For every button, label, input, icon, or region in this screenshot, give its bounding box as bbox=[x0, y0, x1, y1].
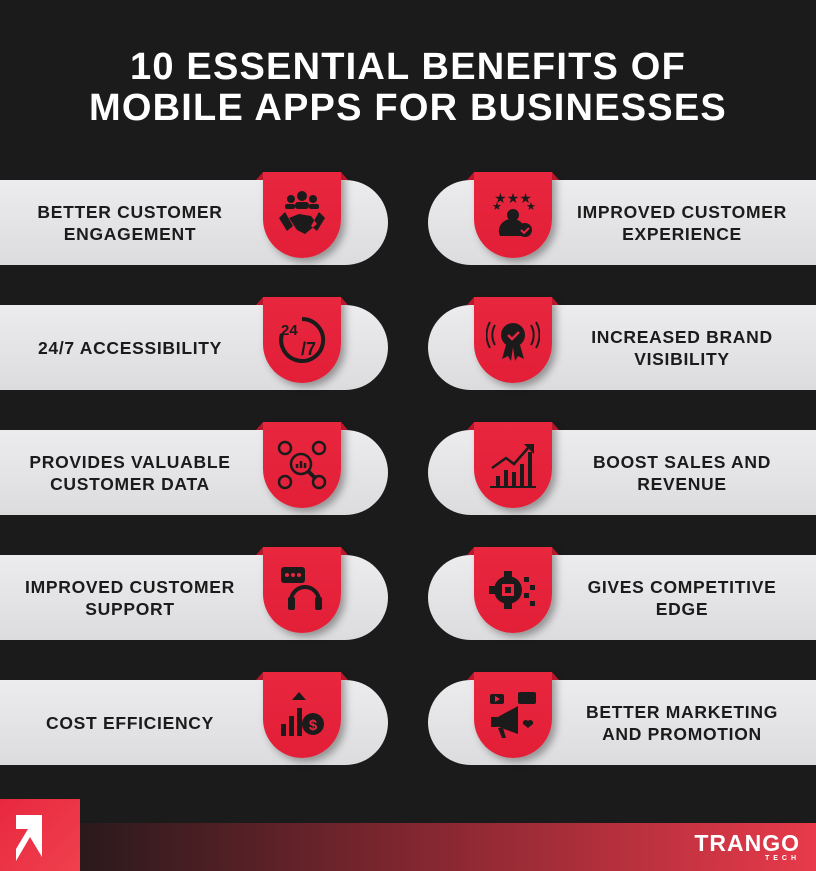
panel: provides valuable customer data: PROVIDES VALUABLE bbox=[29, 452, 231, 472]
panel: boost sales and revenue: BOOST SALES AND bbox=[593, 452, 771, 472]
panel: better marketing and promotion bbox=[428, 680, 816, 765]
panel: better customer engagement: ENGAGEMENT bbox=[64, 224, 196, 244]
icon: growth chart bbox=[474, 422, 552, 508]
panel: better customer engagement bbox=[0, 180, 388, 265]
panel: increased brand visibility: VISIBILITY bbox=[634, 348, 730, 368]
panel: improved customer support: IMPROVED CUSTOMER bbox=[25, 576, 235, 596]
icon: headset chat bbox=[263, 547, 341, 633]
panel: cost efficiency: COST EFFICIENCY bbox=[46, 712, 214, 732]
icon: stars user: ★ bbox=[526, 200, 536, 213]
title: MOBILE APPS FOR BUSINESSES bbox=[89, 87, 727, 129]
icon: 24/7 bbox=[263, 297, 341, 383]
icon: badge award bbox=[474, 297, 552, 383]
icon: stars user: ★ bbox=[492, 200, 502, 213]
icon: gear chip bbox=[474, 547, 552, 633]
panel: provides valuable customer data bbox=[0, 430, 388, 515]
icon: 24/7: /7 bbox=[301, 339, 316, 359]
logo: trango tech: TECH bbox=[765, 855, 800, 862]
panel: improved customer support: SUPPORT bbox=[85, 598, 175, 618]
panel: 24/7 accessibility: 24/7 ACCESSIBILITY bbox=[38, 338, 222, 358]
panel: better marketing and promotion: AND PROMOTION bbox=[602, 724, 762, 744]
panel: gives competitive edge bbox=[428, 555, 816, 640]
panel: boost sales and revenue bbox=[428, 430, 816, 515]
panel: provides valuable customer data: CUSTOMER DATA bbox=[50, 474, 210, 494]
panel: gives competitive edge: GIVES COMPETITIVE bbox=[588, 576, 776, 596]
panel: better customer engagement: BETTER CUSTOMER bbox=[37, 202, 223, 222]
panel: improved customer experience: IMPROVED CUSTOMER bbox=[577, 202, 787, 222]
title bbox=[89, 46, 727, 129]
icon: stars user bbox=[474, 172, 552, 258]
panel: cost efficiency bbox=[0, 680, 388, 765]
icon: stars user: ★★★ bbox=[494, 191, 532, 207]
icon: dollar growth bbox=[263, 672, 341, 758]
icon: data magnifier bbox=[263, 422, 341, 508]
icon: dollar growth: $ bbox=[309, 717, 318, 734]
panel: improved customer experience: EXPERIENCE bbox=[622, 224, 742, 244]
panel: better marketing and promotion: BETTER MARKETING bbox=[586, 702, 778, 722]
panel: improved customer experience bbox=[428, 180, 816, 265]
title: 10 ESSENTIAL BENEFITS OF bbox=[130, 46, 686, 88]
icon: megaphone bbox=[474, 672, 552, 758]
panel: boost sales and revenue: REVENUE bbox=[637, 474, 727, 494]
footer bar bbox=[0, 823, 816, 871]
logo: trango tech: TRANGO bbox=[694, 830, 800, 856]
icon: 24/7: 24 bbox=[281, 322, 298, 339]
logo: arrow mark bbox=[0, 799, 80, 871]
panel: gives competitive edge: EDGE bbox=[656, 598, 708, 618]
panel: improved customer support bbox=[0, 555, 388, 640]
panel: 24/7 accessibility bbox=[0, 305, 388, 390]
panel: increased brand visibility bbox=[428, 305, 816, 390]
icon: handshake bbox=[263, 172, 341, 258]
panel: increased brand visibility: INCREASED BRAND bbox=[591, 326, 773, 346]
